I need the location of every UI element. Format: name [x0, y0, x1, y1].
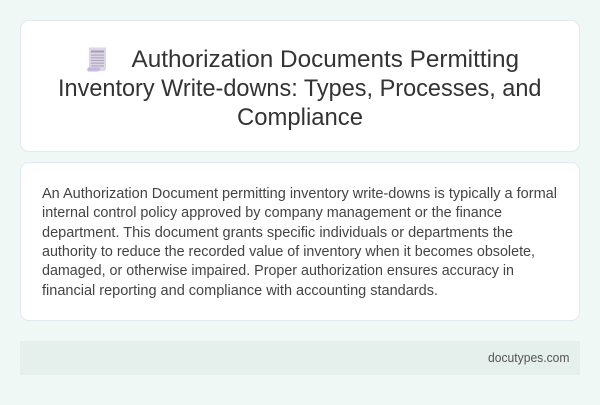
panel: description card: [20, 162, 580, 320]
heading: [58, 46, 542, 131]
heading: Authorization Documents Permitting: [132, 46, 519, 73]
text block: description: department. This document grants specific individuals or departments the: [42, 225, 513, 241]
footer bar: [20, 341, 580, 375]
heading: Compliance: [237, 104, 363, 131]
heading: Inventory Write-downs: Types, Processes, and: [58, 75, 542, 102]
text block: description: [42, 186, 557, 299]
icon: document: [87, 48, 106, 72]
text block: description: financial reporting and compliance with accounting standards.: [42, 283, 438, 299]
text block: description: An Authorization Document permitting inventory write-downs is typically a formal: [42, 186, 557, 202]
text block: description: damaged, or otherwise impaired. Proper authorization ensures accuracy in: [42, 263, 514, 279]
panel: title card: [20, 20, 580, 152]
footer source text: docutypes.com: [488, 351, 570, 365]
text block: description: internal control policy approved by company management or the finance: [42, 205, 502, 221]
text block: description: authority to reduce the recorded value of inventory when it becomes obsolete,: [42, 244, 535, 260]
